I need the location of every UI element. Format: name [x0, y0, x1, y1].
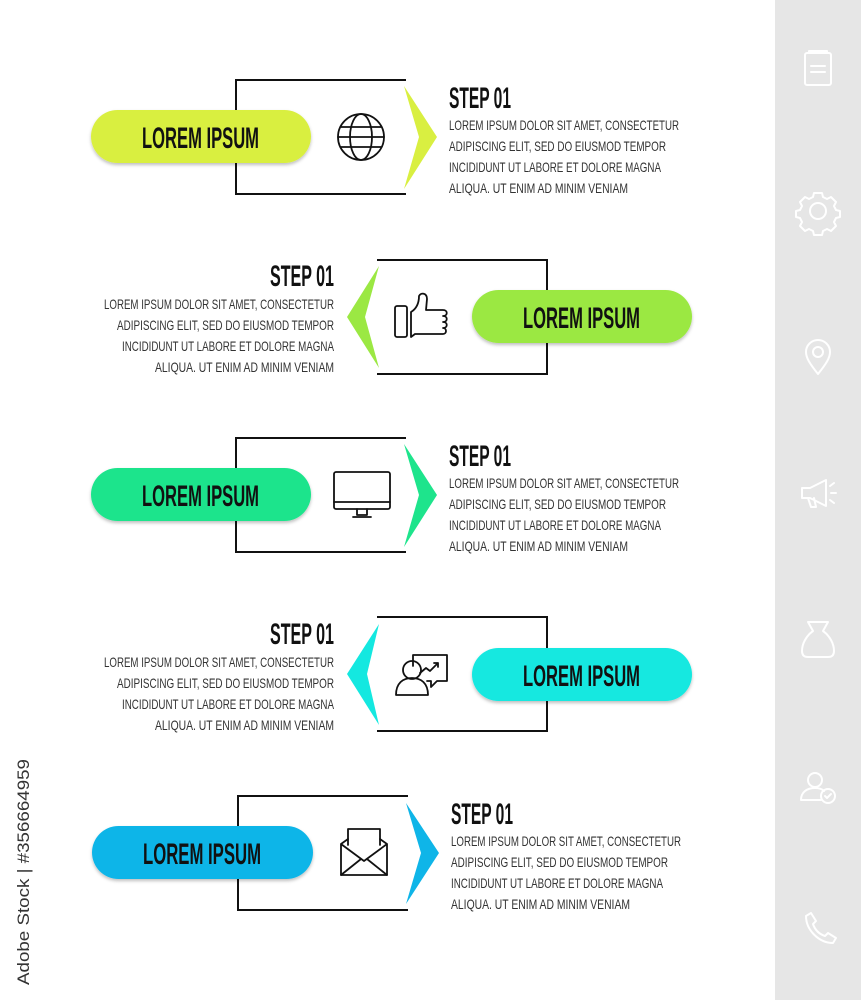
text	[449, 440, 679, 554]
text: ALIQUA. UT ENIM AD MINIM VENIAM	[155, 359, 334, 375]
pill	[472, 648, 692, 701]
step 4	[104, 617, 692, 733]
text: ALIQUA. UT ENIM AD MINIM VENIAM	[449, 538, 628, 554]
icon: megaphone	[802, 480, 836, 507]
text	[104, 260, 334, 375]
text: LOREM IPSUM DOLOR SIT AMET, CONSECTETUR	[104, 654, 334, 670]
pill: LOREM IPSUM	[142, 122, 259, 155]
arrow	[404, 86, 437, 189]
text: ADIPISCING ELIT, SED DO EIUSMOD TEMPOR	[449, 138, 666, 154]
arrow	[347, 624, 379, 725]
text: ADIPISCING ELIT, SED DO EIUSMOD TEMPOR	[117, 317, 334, 333]
text: LOREM IPSUM DOLOR SIT AMET, CONSECTETUR	[449, 117, 679, 133]
text: ADIPISCING ELIT, SED DO EIUSMOD TEMPOR	[451, 854, 668, 870]
text: STEP 01	[451, 798, 513, 831]
icon: presenter	[396, 655, 447, 695]
icon: clipboard	[805, 51, 831, 85]
step 1	[91, 80, 679, 196]
text: INCIDIDUNT UT LABORE ET DOLORE MAGNA	[449, 159, 661, 175]
arrow	[404, 444, 437, 547]
text	[449, 82, 679, 196]
text: ADIPISCING ELIT, SED DO EIUSMOD TEMPOR	[117, 675, 334, 691]
step 3	[91, 438, 679, 554]
text	[104, 618, 334, 733]
text: STEP 01	[270, 618, 334, 651]
text: INCIDIDUNT UT LABORE ET DOLORE MAGNA	[122, 338, 334, 354]
pill: LOREM IPSUM	[142, 480, 259, 513]
icon: gear	[796, 193, 840, 235]
sidebar	[775, 0, 861, 1000]
pill: LOREM IPSUM	[523, 302, 640, 335]
icon: globe	[338, 114, 384, 160]
icon: thumbs up	[395, 294, 447, 337]
icon: phone	[806, 913, 836, 943]
pill	[91, 110, 311, 163]
step 5	[92, 796, 681, 912]
watermark credit: Adobe Stock | #356664959	[14, 759, 33, 985]
icon: user check	[801, 773, 835, 803]
text: INCIDIDUNT UT LABORE ET DOLORE MAGNA	[451, 875, 663, 891]
step 2	[104, 260, 692, 375]
pill	[92, 826, 313, 879]
text: ALIQUA. UT ENIM AD MINIM VENIAM	[451, 896, 630, 912]
arrow	[406, 803, 439, 904]
text: LOREM IPSUM DOLOR SIT AMET, CONSECTETUR	[451, 833, 681, 849]
text	[451, 798, 681, 912]
text: ADIPISCING ELIT, SED DO EIUSMOD TEMPOR	[449, 496, 666, 512]
text: STEP 01	[449, 82, 511, 115]
pill: LOREM IPSUM	[523, 660, 640, 693]
text: INCIDIDUNT UT LABORE ET DOLORE MAGNA	[122, 696, 334, 712]
pill	[91, 468, 311, 521]
pill	[472, 290, 692, 343]
icon: bag	[802, 622, 834, 657]
pill: LOREM IPSUM	[143, 838, 261, 871]
icon: envelope	[341, 829, 387, 875]
arrow	[347, 266, 379, 368]
text: INCIDIDUNT UT LABORE ET DOLORE MAGNA	[449, 517, 661, 533]
text: ALIQUA. UT ENIM AD MINIM VENIAM	[449, 180, 628, 196]
text: STEP 01	[270, 260, 334, 293]
text: ALIQUA. UT ENIM AD MINIM VENIAM	[155, 717, 334, 733]
text: STEP 01	[449, 440, 511, 473]
text: LOREM IPSUM DOLOR SIT AMET, CONSECTETUR	[449, 475, 679, 491]
icon: location pin	[806, 340, 830, 374]
icon: monitor	[334, 472, 390, 517]
text: LOREM IPSUM DOLOR SIT AMET, CONSECTETUR	[104, 296, 334, 312]
